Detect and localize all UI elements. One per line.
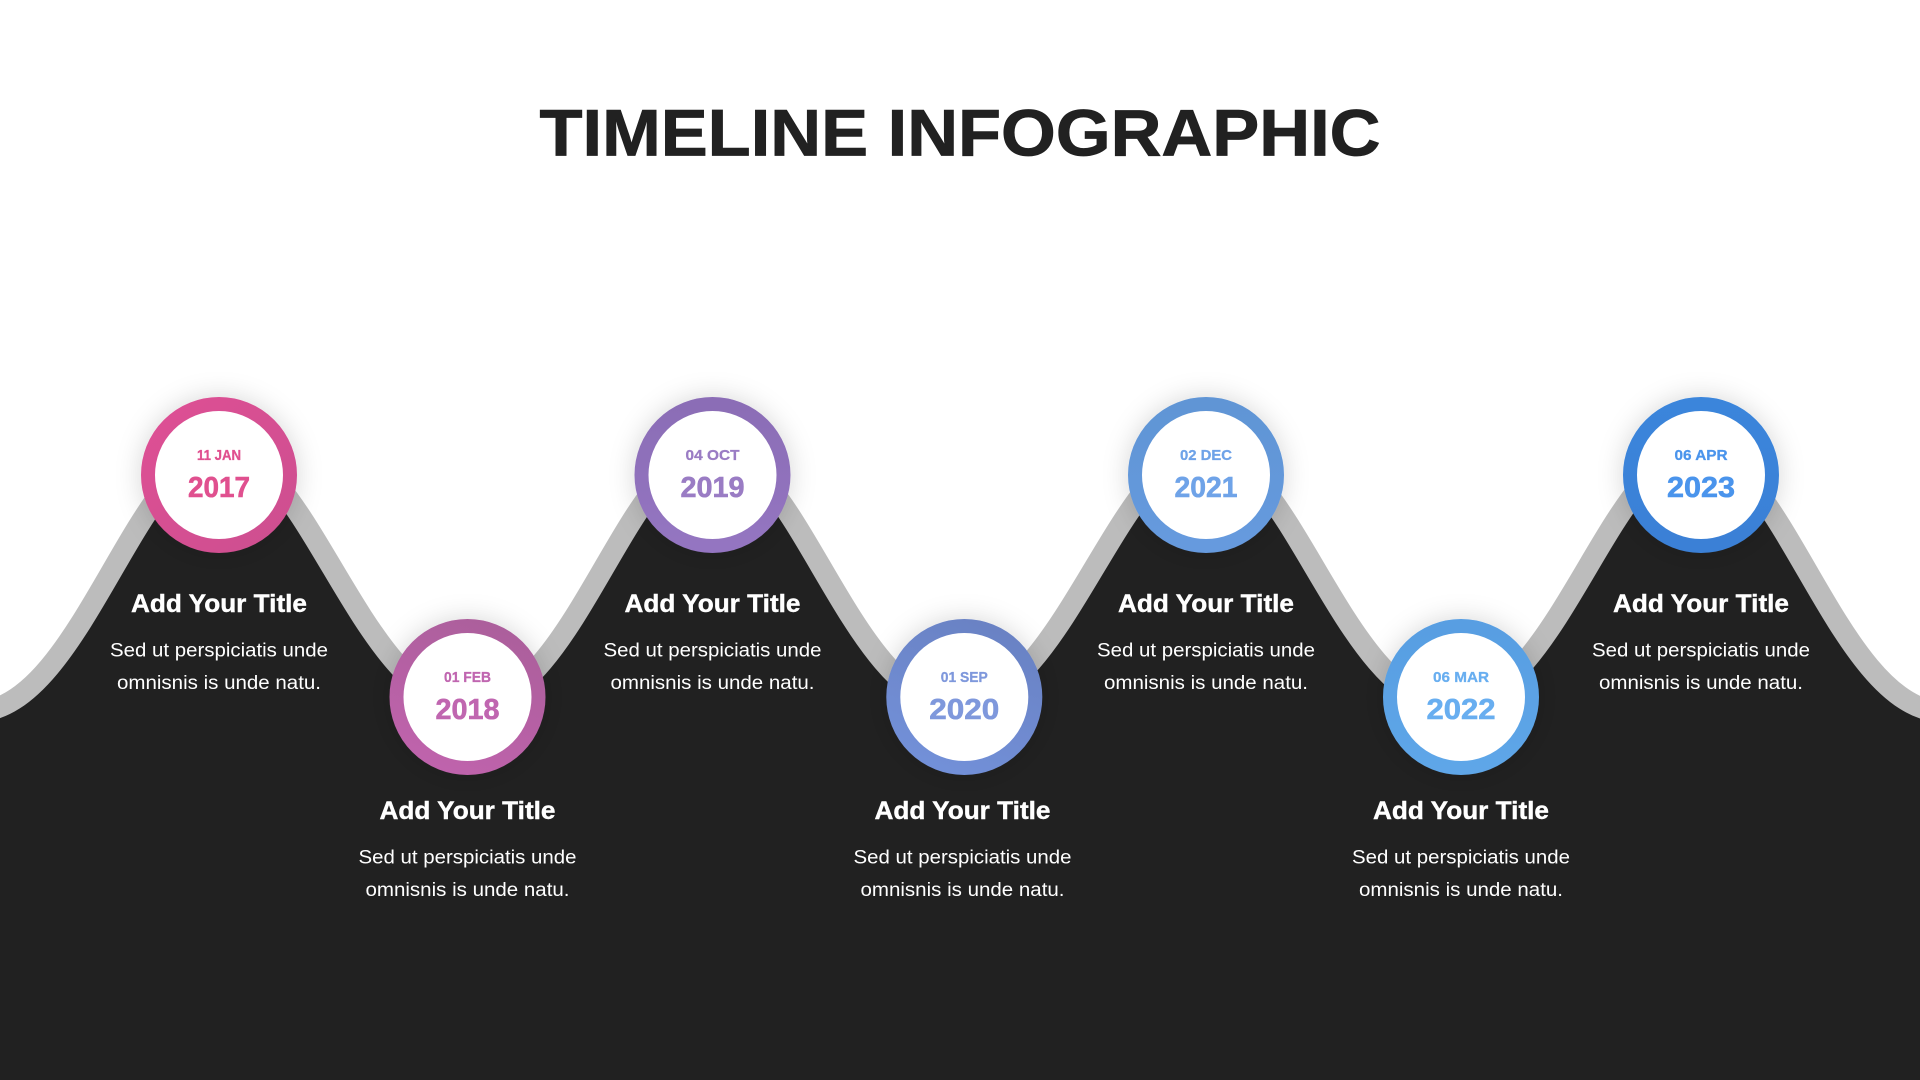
text block 2018: Add Your Title — [380, 797, 556, 825]
text block 2017: Add Your Title — [131, 590, 307, 618]
text block 2017: Sed ut perspiciatis unde — [110, 640, 328, 662]
badge 2021: 02 DEC — [1180, 447, 1232, 464]
badge 2023 — [1630, 404, 1772, 546]
badge 2019 — [642, 404, 784, 546]
badge 2023: 06 APR — [1674, 447, 1728, 464]
milestone 2018 — [358, 626, 576, 901]
text block 2022: Sed ut perspiciatis unde — [1352, 848, 1570, 868]
badge 2017: 2017 — [188, 472, 250, 504]
text block 2022: omnisnis is unde natu. — [1359, 880, 1563, 901]
milestone 2020 — [854, 626, 1072, 901]
milestone 2019 — [604, 404, 822, 694]
badge 2020: 2020 — [929, 694, 999, 726]
badge 2022: 2022 — [1426, 694, 1496, 726]
badge 2017 — [148, 404, 290, 546]
text block 2019: Add Your Title — [624, 590, 801, 618]
text block 2018 — [358, 797, 576, 901]
text block 2019: Sed ut perspiciatis unde — [604, 640, 822, 662]
badge 2022 — [1390, 626, 1532, 768]
milestone 2023 — [1592, 404, 1810, 694]
milestone 2021 — [1097, 404, 1315, 694]
text block 2020 — [854, 797, 1072, 901]
grey timeline curve — [0, 450, 1920, 712]
text block 2018: Sed ut perspiciatis unde — [358, 848, 576, 868]
text block 2023 — [1592, 590, 1810, 694]
milestone 2017 — [110, 404, 328, 694]
badge 2018: 2018 — [436, 694, 500, 726]
badge 2023: 2023 — [1667, 472, 1735, 504]
dark wave area — [0, 450, 1920, 1080]
text block 2020: omnisnis is unde natu. — [860, 880, 1064, 901]
text block 2023: Add Your Title — [1613, 590, 1789, 618]
badge 2019: 04 OCT — [686, 447, 740, 464]
badge 2017: 11 JAN — [197, 447, 241, 464]
milestone 2022 — [1352, 626, 1570, 901]
badge 2019: 2019 — [680, 472, 744, 504]
text block 2021 — [1097, 590, 1315, 694]
badge 2020: 01 SEP — [941, 669, 988, 686]
text block 2020: Add Your Title — [874, 797, 1051, 825]
text block 2021: omnisnis is unde natu. — [1104, 673, 1308, 694]
text block 2022 — [1352, 797, 1570, 901]
badge 2021 — [1135, 404, 1277, 546]
badge 2022: 06 MAR — [1433, 669, 1489, 686]
text block 2023: omnisnis is unde natu. — [1599, 673, 1803, 694]
text block 2017: omnisnis is unde natu. — [117, 673, 321, 694]
text block 2022: Add Your Title — [1373, 797, 1549, 825]
text block 2017 — [110, 590, 328, 694]
title: TIMELINE INFOGRAPHIC — [540, 96, 1380, 170]
text block 2018: omnisnis is unde natu. — [366, 880, 570, 901]
text block 2021: Add Your Title — [1118, 590, 1294, 618]
text block 2023: Sed ut perspiciatis unde — [1592, 640, 1810, 662]
text block 2020: Sed ut perspiciatis unde — [854, 848, 1072, 868]
text block 2019 — [604, 590, 822, 694]
badge 2018 — [396, 626, 538, 768]
text block 2021: Sed ut perspiciatis unde — [1097, 640, 1315, 662]
badge 2020 — [893, 626, 1035, 768]
badge 2018: 01 FEB — [444, 669, 491, 686]
text block 2019: omnisnis is unde natu. — [610, 673, 814, 694]
badge 2021: 2021 — [1174, 472, 1238, 504]
